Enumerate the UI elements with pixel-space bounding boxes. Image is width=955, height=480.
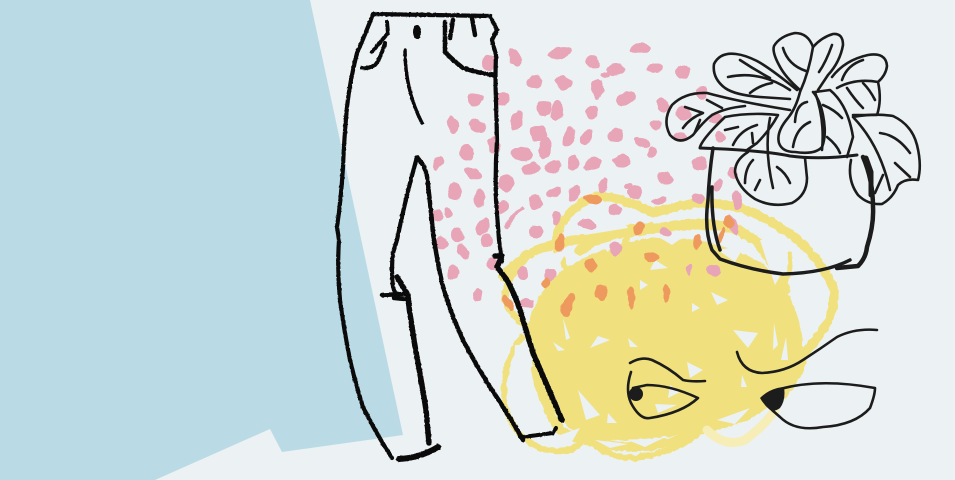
leaf: bottom centre <box>735 118 807 205</box>
left eye <box>628 359 705 418</box>
leaf: rim left <box>700 114 778 150</box>
pink dots <box>431 42 742 308</box>
right outer seam <box>490 16 502 262</box>
inner leg seams <box>417 157 523 440</box>
pot and plant <box>666 33 920 274</box>
panel: blue angular shape <box>0 0 403 480</box>
leaf: far left <box>666 93 790 140</box>
leaf: upper left <box>714 54 797 99</box>
orange dots over the scribble <box>500 194 736 318</box>
pale scribble patch <box>707 410 775 442</box>
trousers <box>337 14 562 459</box>
left pupil <box>629 387 643 401</box>
left pocket <box>362 22 388 68</box>
waistband and left outer seam <box>337 14 490 458</box>
stem leaf centre <box>778 47 825 153</box>
fly and button <box>405 50 422 123</box>
leaf: top centre <box>774 33 813 90</box>
right eye <box>737 330 877 428</box>
right eyebrow <box>737 330 877 373</box>
leaf: top right <box>832 54 887 115</box>
leaf: right large <box>850 115 920 204</box>
right eye outline <box>772 383 875 428</box>
pink and orange paint dots <box>431 42 742 318</box>
leaf: top narrow <box>813 34 843 90</box>
trouser cuffs <box>399 447 438 459</box>
right pocket <box>445 18 493 75</box>
right pupil <box>760 387 784 411</box>
plant pot <box>700 148 873 274</box>
left eye outline <box>628 372 698 418</box>
yellow crayon scribble <box>503 196 834 458</box>
leaf: centre right <box>815 90 853 157</box>
left eyebrow <box>630 359 705 381</box>
gaps in the scribble <box>512 216 827 448</box>
